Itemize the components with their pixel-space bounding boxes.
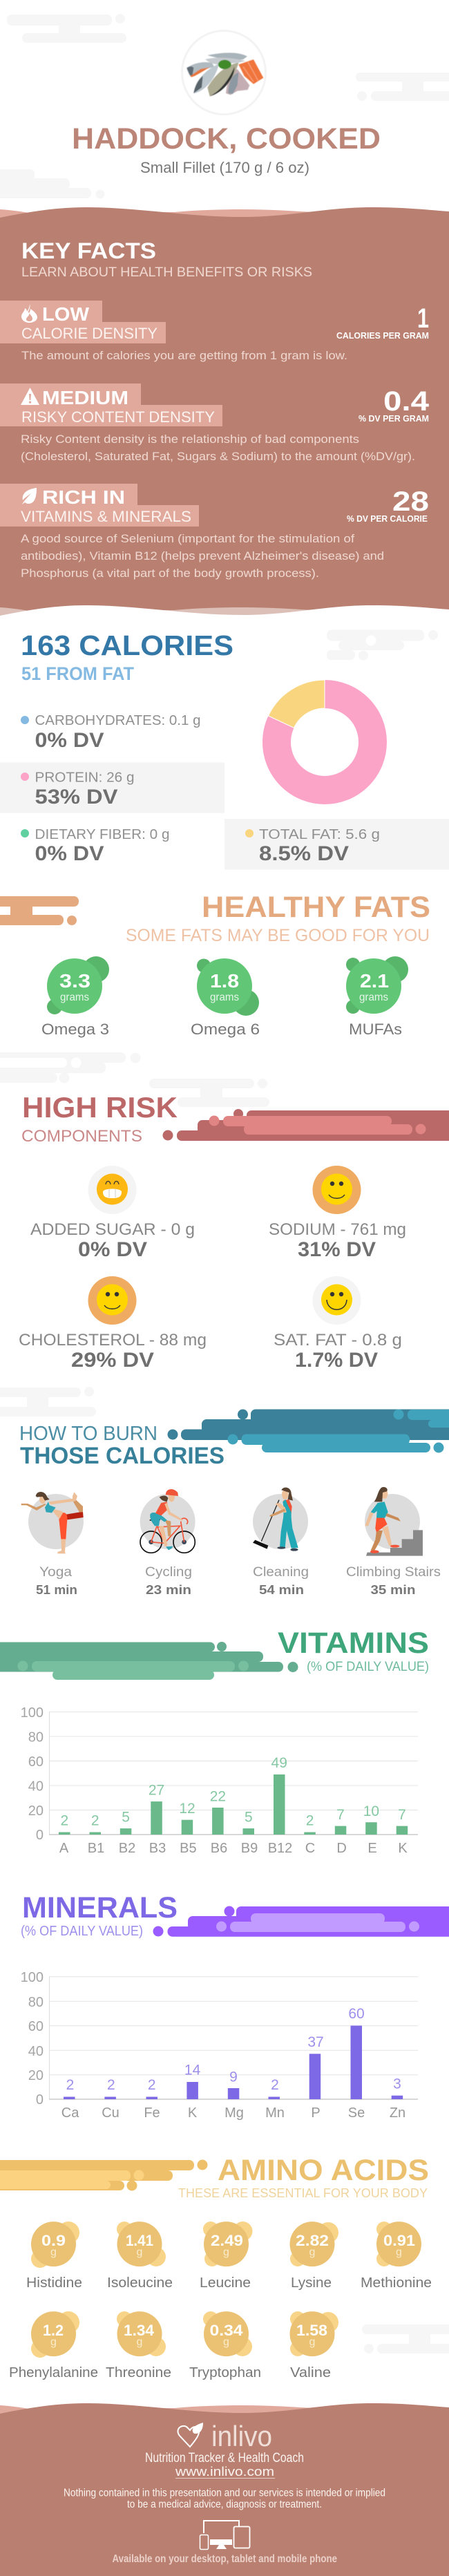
- section: minerals: [21, 1891, 449, 2121]
- logo: inlivo: inlivo: [211, 2420, 272, 2452]
- amino: methionine: 0.91: [383, 2232, 415, 2249]
- added sugar: ADDED SUGAR - 0 g: [30, 1220, 195, 1239]
- footer: [0, 2403, 449, 2576]
- fact: low calorie density: [0, 301, 429, 362]
- bar chart: vitamins: B6: [211, 1841, 227, 1856]
- section: amino acids: [0, 2154, 449, 2380]
- availability note: Available on your desktop, tablet and mobile phone: [112, 2553, 337, 2565]
- bar chart: vitamins: B5: [180, 1841, 197, 1856]
- bar chart: minerals: Cu: [102, 2105, 120, 2121]
- omega 3: 3.3: [59, 970, 90, 992]
- omega 3: [41, 956, 109, 1038]
- amino: methionine: g: [396, 2246, 402, 2258]
- legend: carbohydrates: CARBOHYDRATES: 0.1 g: [35, 713, 200, 728]
- cholesterol: CHOLESTEROL - 88 mg: [19, 1331, 207, 1349]
- cholesterol: 29% DV: [71, 1349, 154, 1372]
- decorative bars: [163, 1109, 449, 1141]
- amino: histidine: Histidine: [26, 2275, 82, 2291]
- saturated fat: SAT. FAT - 0.8 g: [274, 1331, 402, 1349]
- fact: low calorie density: The amount of calories you are getting from 1 gram is low.: [21, 349, 347, 362]
- heading: vitamins: VITAMINS: [278, 1627, 429, 1660]
- subheading: daily value: (% OF DAILY VALUE): [21, 1924, 143, 1939]
- fact: rich in vitamins and minerals: [0, 484, 429, 580]
- sodium: [269, 1166, 406, 1261]
- bar chart: minerals: Mn: [265, 2105, 285, 2121]
- bar chart: minerals: Se: [348, 2105, 365, 2121]
- bar chart: vitamins: 40: [28, 1779, 44, 1794]
- legend: carbohydrates: 0% DV: [35, 729, 104, 752]
- fact: rich in vitamins and minerals: RICH IN: [42, 486, 125, 508]
- amino: histidine: g: [50, 2246, 57, 2258]
- fact: rich in vitamins and minerals: A good source of Selenium (important for the stimulation of: [21, 532, 354, 545]
- website link: www.inlivo.com: [175, 2465, 274, 2479]
- legend: carbohydrates: [21, 713, 200, 752]
- bar chart: minerals: 60: [348, 2006, 365, 2022]
- amino: lysine: g: [309, 2246, 315, 2258]
- amino: lysine: 2.82: [296, 2232, 329, 2249]
- bar chart: minerals: 3: [393, 2076, 401, 2092]
- amino: phenylalanine: 1.2: [43, 2322, 64, 2339]
- amino: methionine: [361, 2222, 432, 2291]
- section: healthy fats: [0, 891, 430, 1038]
- activity: yoga: Yoga: [39, 1565, 72, 1580]
- background cloud: lower left: [0, 169, 105, 199]
- icon: climbing stairs figure: [365, 1487, 423, 1556]
- bar chart: minerals: 2: [66, 2077, 74, 2093]
- omega 6: [191, 958, 260, 1038]
- omega 6: Omega 6: [191, 1021, 260, 1038]
- amino: tryptophan: g: [223, 2336, 229, 2348]
- serving size: Small Fillet (170 g / 6 oz): [140, 159, 309, 176]
- bar chart: vitamins: B2: [119, 1841, 135, 1856]
- activity: yoga: [21, 1492, 84, 1597]
- decorative bars: [167, 1410, 449, 1452]
- amino: lysine: Lysine: [291, 2275, 332, 2291]
- wave: panel bottom: [0, 605, 449, 626]
- fact: rich in vitamins and minerals: Phosphorus (a vital part of the body growth process).: [21, 567, 319, 580]
- bar chart: minerals: Fe: [144, 2105, 160, 2121]
- bar chart: vitamins: B3: [149, 1841, 166, 1856]
- bar chart: minerals: 37: [307, 2034, 324, 2050]
- bar chart: vitamins: E: [367, 1841, 377, 1856]
- legend: protein: [0, 763, 224, 813]
- heading: key facts: KEY FACTS: [21, 238, 156, 263]
- header section: [0, 14, 449, 199]
- amino: valine: 1.58: [296, 2322, 327, 2339]
- amino: phenylalanine: Phenylalanine: [9, 2365, 98, 2380]
- activity: climbing stairs: [346, 1487, 441, 1597]
- heading: those calories: THOSE CALORIES: [20, 1443, 224, 1469]
- saturated fat: [274, 1276, 402, 1372]
- bar chart: vitamins: 0: [36, 1828, 44, 1843]
- heading: amino acids: AMINO ACIDS: [218, 2154, 429, 2187]
- bar chart: minerals: Zn: [390, 2105, 405, 2121]
- activity: yoga: 51 min: [36, 1583, 77, 1597]
- fact: medium risky content density: MEDIUM: [42, 387, 128, 408]
- bar chart: minerals: [21, 1970, 418, 2121]
- bar chart: vitamins: 27: [149, 1783, 164, 1798]
- disclaimer: [64, 2488, 385, 2510]
- bar chart: minerals: Mg: [224, 2105, 244, 2121]
- fact: medium risky content density: RISKY CONTENT DENSITY: [21, 408, 215, 426]
- legend: protein: 53% DV: [35, 786, 117, 808]
- wave: footer top: [0, 2403, 449, 2424]
- amino: valine: Valine: [290, 2365, 331, 2380]
- fact: low calorie density: CALORIE DENSITY: [21, 325, 157, 342]
- section: how to burn those calories: [0, 1387, 449, 1597]
- bar chart: vitamins: C: [305, 1841, 315, 1856]
- activity: cycling: Cycling: [145, 1565, 192, 1580]
- section: high risk components: [0, 1052, 449, 1372]
- background cloud: right: [356, 73, 449, 101]
- bar chart: vitamins: 7: [336, 1807, 345, 1823]
- section: calories: [0, 629, 449, 870]
- subheading: components: COMPONENTS: [21, 1127, 142, 1146]
- amino: lysine: [290, 2222, 338, 2291]
- omega 3: grams: [60, 992, 89, 1003]
- mufas: grams: [359, 992, 388, 1003]
- legend: total fat: 8.5% DV: [259, 842, 349, 865]
- decorative bars: [0, 2160, 207, 2190]
- subheading: daily value: (% OF DAILY VALUE): [307, 1660, 429, 1674]
- bar chart: vitamins: 5: [245, 1809, 253, 1826]
- cholesterol: [19, 1276, 207, 1372]
- activity: climbing stairs: 35 min: [370, 1583, 416, 1597]
- tagline: Nutrition Tracker & Health Coach: [145, 2451, 304, 2465]
- mufas: [346, 956, 408, 1038]
- subheading: SOME FATS MAY BE GOOD FOR YOU: [126, 926, 430, 945]
- bar chart: minerals: 60: [28, 2019, 44, 2034]
- bar chart: minerals: 9: [229, 2069, 238, 2085]
- legend: total fat: TOTAL FAT: 5.6 g: [259, 827, 380, 842]
- decorative bars: [0, 1642, 298, 1680]
- bar chart: vitamins: 12: [179, 1801, 195, 1817]
- amino: leucine: 2.49: [211, 2232, 243, 2249]
- fact: medium risky content density: 0.4: [383, 386, 430, 417]
- subheading: THESE ARE ESSENTIAL FOR YOUR BODY: [178, 2186, 428, 2200]
- activity: cycling: 23 min: [146, 1583, 191, 1597]
- fact: medium risky content density: (Cholesterol, Saturated Fat, Sugars & Sodium) to the amount (%DV/gr).: [21, 450, 415, 463]
- activity: climbing stairs: Climbing Stairs: [346, 1565, 441, 1580]
- legend: dietary fiber: [21, 827, 170, 865]
- decorative bars: [0, 896, 79, 925]
- amino: phenylalanine: [9, 2311, 98, 2380]
- bar chart: vitamins: 22: [210, 1788, 226, 1805]
- legend: dietary fiber: DIETARY FIBER: 0 g: [35, 827, 170, 842]
- bar chart: vitamins: 60: [28, 1754, 44, 1770]
- disclaimer: to be a medical advice, diagnosis or treatment.: [127, 2499, 322, 2510]
- fact: medium risky content density: [0, 383, 430, 463]
- background clouds: [0, 1052, 269, 1107]
- icon: cycling figure: [140, 1489, 195, 1553]
- title: HADDOCK, COOKED: [72, 122, 381, 155]
- icon: flame: [21, 304, 37, 323]
- fact: rich in vitamins and minerals: % DV PER CALORIE: [347, 514, 428, 524]
- heading: 163 calories: 163 CALORIES: [21, 629, 233, 661]
- icon: leaf: [22, 488, 37, 504]
- bar chart: vitamins: [21, 1705, 418, 1856]
- fact: low calorie density: 1: [417, 303, 429, 334]
- bar chart: vitamins: B1: [88, 1841, 104, 1856]
- added sugar: [30, 1166, 195, 1261]
- bar chart: vitamins: 20: [28, 1803, 44, 1819]
- amino: histidine: [26, 2222, 82, 2291]
- bar chart: vitamins: 2: [91, 1813, 99, 1828]
- disclaimer: Nothing contained in this presentation and our services is intended or implied: [64, 2488, 385, 2499]
- bar chart: minerals: 2: [107, 2077, 115, 2093]
- bar chart: minerals: 2: [148, 2077, 156, 2093]
- bar chart: minerals: 100: [21, 1970, 44, 1985]
- saturated fat: 1.7% DV: [295, 1349, 378, 1372]
- amino: isoleucine: [107, 2222, 173, 2291]
- fact: low calorie density: CALORIES PER GRAM: [336, 331, 429, 341]
- amino: tryptophan: [189, 2311, 261, 2380]
- amino: histidine: 0.9: [41, 2232, 66, 2249]
- bar chart: vitamins: 7: [398, 1807, 406, 1823]
- bar chart: vitamins: B9: [241, 1841, 258, 1856]
- heading: how to burn: HOW TO BURN: [19, 1423, 157, 1445]
- omega 6: grams: [210, 992, 239, 1003]
- bar chart: minerals: 80: [28, 1995, 44, 2010]
- icon: warning triangle: [21, 388, 39, 405]
- fact: medium risky content density: Risky Content density is the relationship of bad components: [21, 433, 359, 446]
- background cloud: [0, 1387, 96, 1417]
- bar chart: minerals: 0: [36, 2092, 44, 2108]
- amino: tryptophan: Tryptophan: [189, 2365, 261, 2380]
- fact: rich in vitamins and minerals: 28: [392, 486, 429, 517]
- bar chart: minerals: 14: [184, 2062, 201, 2078]
- activity: cleaning: [253, 1488, 309, 1597]
- bar chart: minerals: 40: [28, 2044, 44, 2059]
- amino: threonine: [106, 2311, 171, 2380]
- bar chart: minerals: P: [311, 2105, 321, 2121]
- omega 3: Omega 3: [41, 1021, 109, 1038]
- legend: total fat: [224, 819, 449, 870]
- amino: isoleucine: g: [137, 2246, 142, 2258]
- subheading: from fat: 51 FROM FAT: [21, 663, 134, 684]
- wave: panel top: [0, 207, 449, 228]
- bar chart: vitamins: 10: [363, 1803, 379, 1819]
- heading: minerals: MINERALS: [22, 1891, 178, 1924]
- icon: cleaning figure: [253, 1488, 308, 1551]
- amino: leucine: Leucine: [200, 2275, 251, 2291]
- bar chart: vitamins: 100: [21, 1705, 44, 1721]
- bar chart: vitamins: 80: [28, 1730, 44, 1745]
- fact: medium risky content density: % DV PER GRAM: [359, 414, 429, 424]
- bar chart: minerals: 20: [28, 2068, 44, 2083]
- donut chart: [268, 680, 373, 790]
- decorative bars: [153, 1906, 449, 1937]
- bar chart: vitamins: 2: [306, 1813, 314, 1828]
- bar chart: minerals: Ca: [61, 2105, 79, 2121]
- background cloud: [327, 630, 438, 661]
- icon: yoga figure: [21, 1492, 84, 1553]
- amino: valine: g: [309, 2336, 315, 2348]
- activity: cycling: [140, 1489, 195, 1597]
- bar chart: vitamins: B12: [268, 1841, 292, 1856]
- fact: rich in vitamins and minerals: antibodies), Vitamin B12 (helps prevent Alzheimer's disease) and: [21, 549, 384, 562]
- bar chart: vitamins: 2: [60, 1813, 68, 1828]
- legend: protein: PROTEIN: 26 g: [35, 770, 134, 785]
- amino: threonine: 1.34: [124, 2322, 155, 2339]
- amino: threonine: Threonine: [106, 2365, 171, 2380]
- mufas: 2.1: [360, 970, 389, 992]
- added sugar: 0% DV: [78, 1238, 147, 1261]
- background cloud: [362, 2324, 449, 2354]
- amino: valine: [290, 2311, 338, 2380]
- amino: methionine: Methionine: [361, 2275, 432, 2291]
- legend: dietary fiber: 0% DV: [35, 842, 104, 865]
- icon: devices: [200, 2521, 250, 2550]
- amino: leucine: [200, 2222, 253, 2291]
- amino: tryptophan: 0.34: [210, 2322, 243, 2339]
- fact: rich in vitamins and minerals: VITAMINS & MINERALS: [21, 508, 191, 525]
- bar chart: vitamins: K: [398, 1841, 408, 1856]
- sodium: 31% DV: [298, 1238, 376, 1261]
- food image: fish in a circle: [182, 30, 265, 115]
- bar chart: minerals: 2: [271, 2077, 279, 2093]
- bar chart: vitamins: 5: [122, 1809, 130, 1826]
- amino: isoleucine: Isoleucine: [107, 2275, 173, 2291]
- heading: high risk: HIGH RISK: [22, 1091, 178, 1124]
- bar chart: vitamins: D: [336, 1841, 347, 1856]
- heading: healthy fats: HEALTHY FATS: [202, 891, 430, 924]
- amino: isoleucine: 1.41: [126, 2232, 153, 2249]
- amino: leucine: g: [223, 2246, 229, 2258]
- bar chart: vitamins: 49: [271, 1755, 287, 1771]
- fact: low calorie density: LOW: [42, 303, 90, 325]
- sodium: SODIUM - 761 mg: [269, 1220, 406, 1239]
- bar chart: minerals: K: [188, 2105, 198, 2121]
- background cloud: top left: [7, 14, 126, 43]
- panel: key facts: [0, 207, 449, 626]
- subheading: learn about: LEARN ABOUT HEALTH BENEFITS OR RISKS: [21, 265, 312, 280]
- omega 6: 1.8: [210, 970, 239, 992]
- amino: phenylalanine: g: [50, 2336, 57, 2348]
- mufas: MUFAs: [349, 1021, 402, 1038]
- amino: threonine: g: [137, 2336, 142, 2348]
- activity: cleaning: 54 min: [259, 1583, 304, 1597]
- section: vitamins: [0, 1627, 429, 1856]
- bar chart: vitamins: A: [59, 1841, 69, 1856]
- activity: cleaning: Cleaning: [253, 1565, 309, 1580]
- logo: inlivo: [178, 2420, 272, 2452]
